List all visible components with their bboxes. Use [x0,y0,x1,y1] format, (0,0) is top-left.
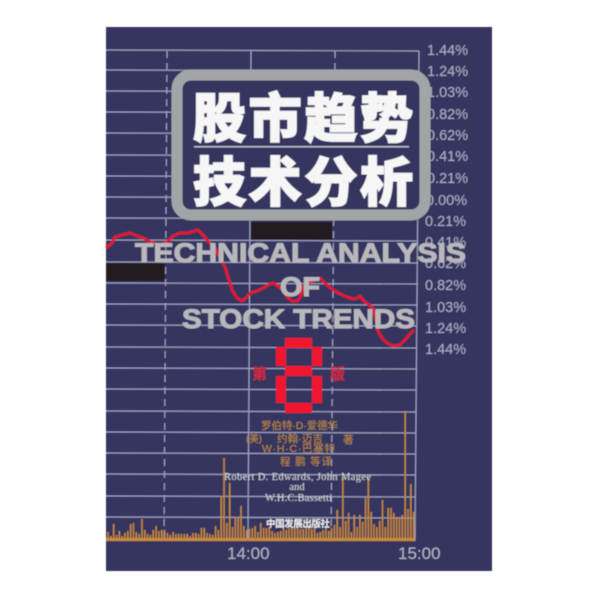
english title: OF [280,272,320,302]
title line 1: 股市趋势 [193,77,413,153]
chinese authors: 约翰·迈吉 [277,432,323,445]
edition label left: 第 [252,365,267,383]
english title [135,238,466,334]
percentage scale labels: 1.24% [425,321,466,337]
english title: STOCK TRENDS [182,304,415,334]
chinese authors: 著 [343,433,354,446]
percentage scale labels: 0.82% [427,107,468,123]
volume bars [108,411,414,541]
time label 15:00: 15:00 [398,544,441,563]
edition number 8 [276,338,322,413]
cover artwork [106,27,492,571]
time label 14:00: 14:00 [227,544,270,563]
percentage scale labels: 1.24% [427,64,468,80]
percentage scale labels: 0.41% [425,235,466,251]
percentage scale labels: 1.03% [427,85,468,101]
chinese authors: 程 鹏 等译 [280,455,332,468]
percentage scale labels: 1.44% [427,43,468,59]
percentage scale labels: 0.62% [425,256,466,272]
percentage scale labels: 0.21% [425,214,466,230]
chinese authors: W·H·C·巴塞特 [262,442,336,455]
chinese authors: 罗伯特·D·爱德华 [261,419,338,432]
percentage scale labels: 0.62% [427,128,468,144]
percentage scale labels: 1.03% [425,300,466,316]
cover background [106,27,492,571]
percentage scale labels: 0.41% [427,149,468,165]
volume baseline [106,538,415,541]
publisher: 中国发展出版社 [266,518,330,530]
percentage scale labels: 1.44% [425,342,466,358]
edition label right: 版 [330,366,345,383]
english authors: Robert D. Edwards, John Magee [224,472,371,483]
percentage scale labels [425,43,468,358]
english authors: and [289,482,305,493]
english authors [224,472,371,504]
title line 2: 技术分析 [193,141,413,217]
percentage scale labels: 0.00% [426,193,467,209]
red price line [106,230,414,346]
black bar: left [106,263,165,281]
black bar: upper centre [251,222,332,240]
chinese authors [246,419,354,468]
percentage scale labels: 0.82% [425,278,466,294]
chinese authors: (美) [246,432,262,445]
english title: TECHNICAL ANALYSIS [135,238,466,268]
english authors: W.H.C.Bassetti [265,493,332,504]
title plate [177,75,425,217]
percentage scale labels: 0.21% [427,171,468,187]
